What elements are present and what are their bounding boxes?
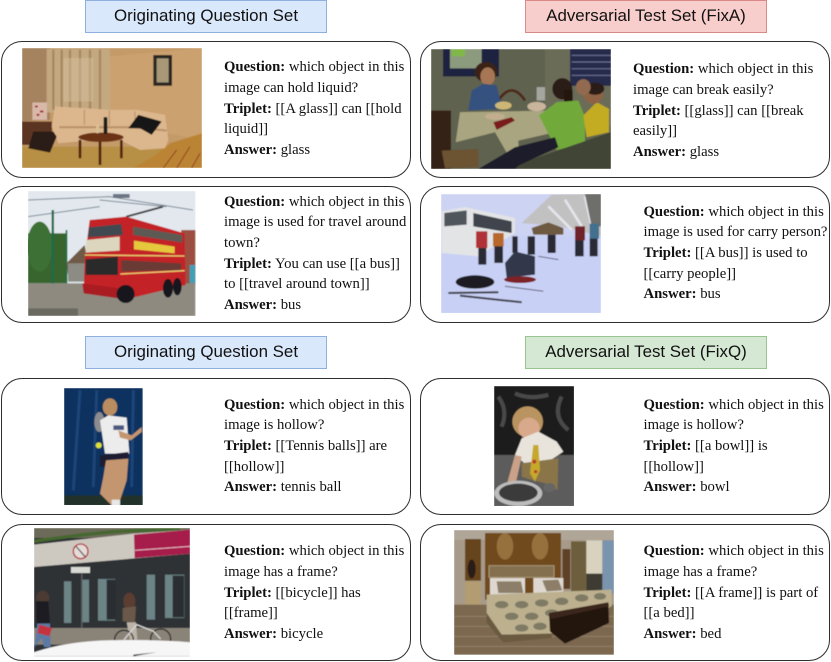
- panel: dining table example: [420, 41, 830, 178]
- text: question, triplet, answer: Answer: bus: [644, 286, 721, 302]
- image: tennis player: [64, 388, 143, 505]
- text: question, triplet, answer: Question: which object in this: [224, 194, 404, 210]
- image: street with bicycle: [34, 528, 190, 657]
- text: question, triplet, answer: easily]]: [633, 123, 677, 139]
- text: question, triplet, answer: [644, 397, 824, 495]
- panel: bedroom example: [420, 524, 830, 661]
- text: question, triplet, answer: Triplet: [[a bowl]] is: [644, 438, 768, 454]
- text: question, triplet, answer: [224, 59, 404, 158]
- text: question, triplet, answer: Answer: bed: [644, 626, 721, 642]
- text: question, triplet, answer: Triplet: [[A frame]] is part of: [644, 585, 818, 601]
- text: question, triplet, answer: image can hold liquid?: [224, 80, 358, 96]
- text: question, triplet, answer: Triplet: [[bicycle]] has: [224, 585, 361, 601]
- header: adversarial test set FixA: Adversarial Test Set (FixA): [546, 6, 746, 25]
- panel: snow bus example: [420, 186, 830, 323]
- text: question, triplet, answer: [224, 397, 404, 495]
- image: family at dining table: [431, 49, 611, 169]
- text: question, triplet, answer: Answer: bowl: [644, 479, 730, 495]
- text: question, triplet, answer: Triplet: [[A glass]] can [[hold: [224, 101, 402, 117]
- header: adversarial test set FixQ: [525, 336, 767, 369]
- text: question, triplet, answer: image can break easily?: [633, 82, 774, 98]
- text: question, triplet, answer: Answer: glass: [224, 142, 310, 158]
- text: question, triplet, answer: liquid]]: [224, 121, 268, 137]
- text: question, triplet, answer: image is hollow?: [224, 417, 324, 433]
- text: question, triplet, answer: Triplet: You can use [[a bus]]: [224, 256, 400, 272]
- image: child with bowl: [494, 386, 574, 506]
- text: question, triplet, answer: Triplet: [[glass]] can [[break: [633, 103, 804, 119]
- panel: child with bowl example: [420, 378, 830, 515]
- text: question, triplet, answer: image is hollow?: [644, 417, 744, 433]
- header: originating question set (top): Originating Question Set: [114, 6, 298, 25]
- text: question, triplet, answer: Triplet: [[A bus]] is used to: [644, 245, 808, 261]
- text: question, triplet, answer: [[carry people]]: [644, 266, 736, 282]
- text: question, triplet, answer: [[frame]]: [224, 605, 278, 621]
- text: question, triplet, answer: [644, 204, 827, 302]
- text: question, triplet, answer: Question: which object in this: [224, 543, 404, 559]
- text: question, triplet, answer: Answer: bicycle: [224, 626, 323, 642]
- text: question, triplet, answer: [[hollow]]: [644, 459, 704, 475]
- text: question, triplet, answer: Question: which object in this: [224, 59, 404, 75]
- image: red double-decker bus: [28, 191, 196, 316]
- text: question, triplet, answer: Question: which object in this: [644, 397, 824, 413]
- image: living room: [22, 48, 202, 168]
- panel: red bus example: [1, 186, 411, 323]
- text: question, triplet, answer: Answer: tennis ball: [224, 479, 341, 495]
- text: question, triplet, answer: Triplet: [[Tennis balls]] are: [224, 438, 387, 454]
- text: question, triplet, answer: [633, 61, 813, 160]
- text: question, triplet, answer: image has a frame?: [644, 564, 757, 580]
- text: question, triplet, answer: [224, 543, 404, 642]
- text: question, triplet, answer: Question: which object in this: [633, 61, 813, 77]
- header: adversarial test set FixQ: Adversarial Test Set (FixQ): [545, 342, 747, 361]
- text: question, triplet, answer: [[hollow]]: [224, 459, 284, 475]
- text: question, triplet, answer: [[a bed]]: [644, 605, 694, 621]
- text: question, triplet, answer: [224, 194, 406, 313]
- header: adversarial test set FixA: [525, 0, 767, 33]
- text: question, triplet, answer: to [[travel around town]]: [224, 276, 370, 292]
- header: originating question set (bottom): [85, 336, 327, 369]
- text: question, triplet, answer: image is used for carry person?: [644, 224, 827, 240]
- text: question, triplet, answer: Question: which object in this: [644, 543, 824, 559]
- text: question, triplet, answer: image is used for travel around: [224, 214, 406, 230]
- header: originating question set (top): [85, 0, 327, 33]
- panel: street with bicycle example: [1, 524, 411, 661]
- text: question, triplet, answer: Answer: bus: [224, 297, 301, 313]
- text: question, triplet, answer: Answer: glass: [633, 144, 719, 160]
- image: bus and skiers in snow: [441, 194, 601, 313]
- text: question, triplet, answer: Question: which object in this: [644, 204, 824, 220]
- text: question, triplet, answer: Question: which object in this: [224, 397, 404, 413]
- text: question, triplet, answer: image has a frame?: [224, 564, 338, 580]
- panel: living room example: [1, 41, 411, 178]
- image: hotel bedroom: [454, 530, 614, 655]
- text: question, triplet, answer: town?: [224, 235, 260, 251]
- panel: tennis player example: [1, 378, 411, 515]
- text: question, triplet, answer: [644, 543, 824, 642]
- header: originating question set (bottom): Originating Question Set: [114, 342, 298, 361]
